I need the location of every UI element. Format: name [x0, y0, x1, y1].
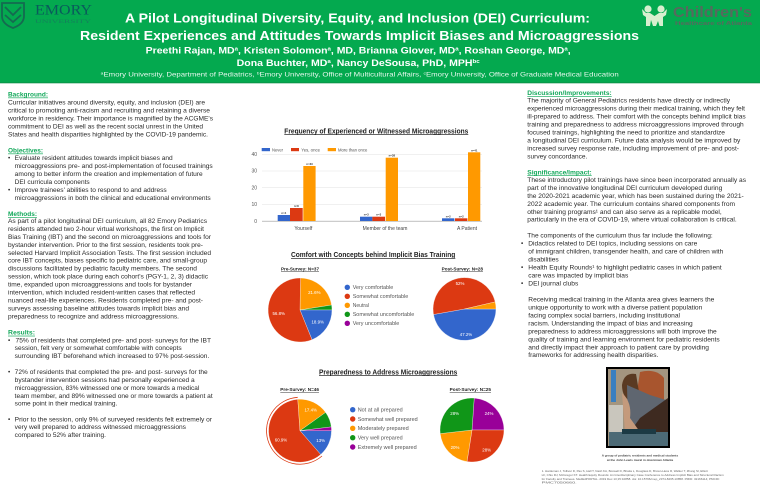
chart legend: Never: [272, 148, 283, 152]
discussion section: increased survey response rate, including improvement of pre- and post-: [527, 145, 739, 152]
references: [542, 469, 724, 485]
objectives section: Objectives:: [8, 148, 43, 154]
pie chart: preparedness pre-survey: 60.9%: [275, 438, 287, 442]
results section: •: [8, 337, 10, 344]
background section: [7, 92, 213, 138]
results section: bystander intervention sessions had personally experienced a: [15, 377, 195, 384]
Children's wordmark: Healthcare of Atlanta: [675, 21, 753, 27]
legend: comfort: Somewhat uncomfortable: [353, 312, 414, 318]
authors: a: [455, 46, 460, 52]
pie chart: preparedness post-survey: 24%: [485, 411, 493, 416]
bar chart: frequency of microaggressions: n=3: [364, 213, 369, 217]
bar chart: frequency of microaggressions: A Patient: [457, 226, 478, 232]
pie chart: preparedness post-survey: 28%: [482, 448, 491, 452]
chart legend: Yes, once: [301, 148, 320, 152]
results section: 75% of residents that completed pre- and post- surveys for the IBT: [16, 337, 211, 344]
significance section: part of the innovative longitudinal DEI curriculum developed during: [527, 185, 723, 192]
header banner: [0, 0, 760, 83]
legend: preparedness: [350, 407, 418, 451]
curriculum components list: of immigrant children, transgender health, and care of children with: [528, 249, 724, 256]
objectives section: •: [8, 155, 10, 162]
title: [80, 10, 639, 43]
significance section: These introductory pilot trainings have since been incorporated annually as: [527, 177, 746, 184]
bar chart: frequency of microaggressions: n=3: [376, 213, 382, 217]
results section: some point in their medical training.: [15, 401, 118, 408]
pie chart: preparedness post-survey: 28%: [450, 411, 459, 416]
pie chart: preparedness post-survey: [440, 398, 504, 462]
pie chart: preparedness post-survey: 20%: [451, 445, 459, 450]
curriculum components list: The components of the curriculum thus far include the following:: [527, 232, 713, 239]
closing paragraph: Receiving medical training in the Atlanta area gives learners the: [528, 297, 715, 304]
objectives section: among to better inform the creation and implementation of future: [15, 171, 203, 178]
bar chart: frequency of microaggressions: 20: [251, 185, 257, 191]
significance section: the 2020-2021 academic year, which has been sustained during the 2021-: [527, 193, 744, 200]
discussion section: training and preparedness to address microaggressions improved through: [527, 122, 744, 129]
authors: Preethi Rajan, MD: [146, 44, 225, 56]
legend: comfort: [345, 285, 414, 327]
panel: center charts: [251, 128, 504, 464]
title: A Pilot Longitudinal Diversity, Equity, and Inclusion (DEI) Curriculum:: [125, 10, 590, 26]
bar chart: frequency of microaggressions: Yourself: [294, 226, 313, 232]
pie chart: comfort pre-survey: 56.8%: [272, 311, 285, 316]
bar chart: frequency of microaggressions: 10: [251, 202, 257, 208]
authors: , Roshan George, MD: [459, 44, 565, 56]
chart legend: [262, 148, 368, 152]
photo caption: [602, 454, 678, 462]
results section: compared to 52% after training.: [15, 432, 106, 439]
authors: a: [327, 59, 332, 65]
significance section: Significance/Impact:: [527, 169, 592, 176]
background section: Background:: [8, 92, 48, 98]
authors: a: [564, 46, 569, 52]
legend: comfort: Very comfortable: [353, 285, 393, 291]
background section: States and health disparities highlighted by the COVID-19 pandemic.: [8, 131, 208, 138]
methods section: surveys assessing baseline attitudes towards implicit bias and: [8, 306, 189, 312]
discussion section: a longitudinal DEI curriculum. Future data analysis would be improved by: [527, 138, 741, 145]
methods section: As part of a pilot longitudinal DEI curriculum, all 82 Emory Pediatrics: [8, 218, 207, 225]
curriculum components list: Health Equity Rounds¹ to highlight pediatric cases in which patient: [528, 265, 722, 272]
Children's wordmark: Children's: [673, 4, 752, 21]
heading: preparedness charts: Preparedness to Address Microaggressions: [319, 369, 457, 376]
references: LF, Chiu RJ, McGregor KT. Health Equity Rounds: An Interdisciplinary Case Conference to Address Implicit Bias and Structural Racism: [542, 473, 724, 477]
closing paragraph: and directly impact their approach to patient care by providing: [528, 344, 709, 352]
bar chart: frequency of microaggressions: [251, 148, 482, 232]
affiliations: Emory University, Office of Graduate Medical Education: [426, 72, 619, 78]
affiliations: Emory University, Office of Multicultural Affairs,: [260, 72, 423, 78]
curriculum components list: •: [521, 265, 523, 272]
discussion section: focused trainings, highlighting the need to prioritize and standardize: [527, 130, 725, 137]
legend: preparedness: Extremely well prepared: [358, 445, 417, 451]
photo caption: at the John Lewis mural in downtown Atlanta: [607, 458, 673, 462]
methods section: selected Harvard Implicit Association Tests. The first session included: [8, 250, 211, 257]
authors: , MD, Brianna Glover, MD: [331, 44, 455, 56]
label: pre-survey comfort: Pre-Survey: N=37: [281, 266, 319, 271]
discussion section: Discussion/Improvements:: [527, 90, 612, 97]
photo caption: A group of pediatric residents and medical students: [602, 454, 678, 458]
icon: Children's logo children: [642, 5, 667, 26]
closing paragraph: unique opportunity to work with a diverse patient population: [528, 305, 703, 312]
objectives section: [8, 148, 213, 202]
discussion section: experienced microaggressions during their medical training, which they felt: [527, 106, 745, 113]
objectives section: microaggressions pre- and post-implementation of focused trainings: [15, 163, 213, 170]
results section: [8, 330, 213, 439]
label: post-survey comfort: Post-Survey: N=28: [442, 266, 483, 271]
bar chart: frequency of microaggressions: n=33: [306, 162, 313, 166]
legend: preparedness: Not at all prepared: [358, 408, 403, 414]
significance section: 2022 academic year. The curriculum contains shared components from: [527, 201, 735, 208]
results section: •: [8, 416, 10, 423]
background section: workforce in residency. Their importance is magnified by the ACGME's: [7, 115, 213, 122]
discussion section: [527, 90, 746, 160]
pie chart: preparedness pre-survey: [267, 397, 332, 464]
label: post-survey preparedness: Post-Survey: N=25: [450, 387, 491, 392]
methods section: discussions facilitated by pediatric faculty members. The second: [8, 266, 197, 273]
methods section: Methods:: [8, 211, 37, 218]
panel: right column: [521, 90, 746, 485]
references: 1. Hardeman J, Tolliver D, Pau S, Hall T, Nash KA, Boswell D, Bhatia L, Douglass D, Brown-Hess R, Walker T, Zhang SI, Elliott: [542, 469, 708, 473]
label: pre-survey preparedness: Pre-Survey: N=46: [280, 387, 319, 392]
affiliations: c: [423, 70, 426, 76]
pie chart: comfort post-survey: 52%: [456, 281, 464, 286]
authors: , Kristen Solomon: [238, 44, 328, 56]
methods section: residents attended two 2-hour virtual workshops, the first on Implicit: [8, 226, 204, 233]
results section: session, felt very or somewhat comfortable with concepts: [15, 345, 182, 352]
legend: comfort: Somewhat comfortable: [353, 294, 408, 300]
pie chart: comfort pre-survey: 21.6%: [308, 290, 321, 295]
curriculum components list: disabilities: [528, 257, 559, 264]
authors: a: [327, 46, 332, 52]
closing paragraph: frameworks for addressing health disparities.: [528, 352, 659, 359]
legend: comfort: Neutral: [353, 303, 369, 309]
closing paragraph: quality of training and learning environment for pediatric residents: [528, 336, 720, 344]
bar chart: frequency of microaggressions: 0: [254, 219, 257, 225]
background section: commitment to DEI as well as the recent social unrest in the United: [8, 123, 203, 130]
results section: •: [8, 369, 10, 376]
significance section: [527, 169, 746, 224]
bar chart: frequency of microaggressions: n=4: [281, 211, 287, 215]
methods section: intervention, which included resident-written cases that reflected: [8, 290, 195, 297]
authors: bc: [472, 59, 480, 65]
methods section: preparedness to recognize and address microaggressions.: [8, 314, 179, 320]
authors: a: [235, 46, 239, 52]
references: for Faculty and Trainees. MedEdPORTAL. 2019 Dec 13;15:10858. doi: 10.15766/mep_2374-8265.10858. PMID: 32166114; PMCID:: [542, 477, 720, 481]
objectives section: Improve trainees' abilities to respond to and address: [15, 187, 167, 194]
photo: residents at the John Lewis mural: [606, 367, 670, 448]
bar chart: frequency of microaggressions: n=2: [446, 214, 451, 218]
objectives section: DEI curricula components: [15, 179, 90, 186]
results section: Results:: [8, 330, 35, 337]
objectives section: microaggressions in both the clinical and educational environments: [15, 195, 211, 202]
methods section: core IBT concepts, biases specific to pediatric care, and small-group: [8, 258, 207, 265]
legend: preparedness: Somewhat well prepared: [358, 417, 418, 423]
pie chart: comfort post-survey: [433, 278, 496, 340]
results section: surrounding IBT beforehand which increased to 97% post-session.: [15, 353, 210, 360]
discussion section: survey concordance.: [527, 153, 588, 160]
authors: [146, 44, 571, 68]
results section: team member, and 89% witnessed one or more towards a patient at: [15, 393, 213, 400]
legend: comfort: Very uncomfortable: [353, 321, 399, 327]
pie chart: comfort post-survey: 47.2%: [460, 332, 472, 337]
pie chart: comfort pre-survey: 18.9%: [311, 320, 324, 324]
affiliations: Emory University, Department of Pediatrics,: [103, 72, 257, 78]
curriculum components list: Didactics related to DEI topics, including sessions on care: [528, 241, 698, 248]
closing paragraph: racism. Understanding the impact of bias and increasing: [528, 321, 693, 328]
background section: critical to promoting anti-racism and recruiting and retaining a diverse: [8, 107, 210, 114]
Emory wordmark: [35, 2, 92, 25]
closing paragraph: preparedness to address microaggressions will both improve the: [528, 328, 717, 336]
bar chart: frequency of microaggressions: Member of the team: [363, 226, 407, 232]
heading: comfort charts: Comfort with Concepts behind Implicit Bias Training: [291, 252, 455, 259]
methods section: Bias Training (IBT) and the second on microaggressions and tools for: [8, 234, 212, 241]
title: Resident Experiences and Attitudes Towards Implicit Biases and Microaggressions: [80, 28, 639, 43]
curriculum components list: •: [521, 241, 523, 248]
results section: very well prepared to address witnessed microaggressions: [15, 424, 186, 431]
affiliations: a: [101, 70, 104, 76]
pie chart: comfort pre-survey: [268, 278, 332, 342]
bar chart: frequency of microaggressions: n=38: [389, 154, 395, 158]
authors: Dona Buchter, MD: [237, 57, 317, 68]
bar chart: frequency of microaggressions: n=41: [471, 148, 478, 152]
results section: Prior to the session, only 9% of surveyed residents felt extremely or: [15, 416, 213, 423]
methods section: bystander intervention. Prior to the first session, residents took pre-: [8, 242, 203, 249]
icon: Emory shield logo: [2, 3, 24, 28]
authors: , Nancy DeSousa, PhD, MPH: [331, 57, 473, 68]
pie chart: preparedness pre-survey: 13%: [316, 438, 325, 443]
methods section: nuanced real-life experiences. Residents completed pre- and post-: [8, 298, 203, 304]
bar chart: frequency of microaggressions: 40: [251, 152, 257, 158]
legend: preparedness: Very well prepared: [358, 436, 403, 442]
bar chart: frequency of microaggressions: n=2: [459, 214, 464, 218]
Emory wordmark: EMORY: [35, 2, 92, 18]
methods section: time, expanded upon microaggressions and tools for bystander: [8, 282, 193, 289]
bar chart: frequency of microaggressions: 30: [251, 169, 257, 175]
discussion section: The majority of General Pediatrics residents have directly or indirectly: [527, 98, 731, 105]
curriculum components list: DEI journal clubs: [528, 281, 578, 288]
methods section: [8, 211, 212, 320]
curriculum components list: •: [521, 281, 523, 288]
objectives section: Evaluate resident attitudes towards implicit biases and: [15, 155, 173, 162]
legend: preparedness: Moderately prepared: [358, 426, 409, 432]
pie chart: preparedness pre-survey: 17.4%: [304, 408, 317, 412]
authors: ,: [568, 44, 571, 56]
discussion section: ill-prepared to address. Their comfort with the concepts behind implicit bias: [527, 114, 746, 121]
Children's wordmark: [673, 4, 753, 27]
chart legend: More than once: [338, 148, 368, 152]
closing paragraph: [528, 297, 720, 359]
curriculum components list: [521, 232, 724, 288]
heading: frequency chart: Frequency of Experienced or Witnessed Microaggressions: [284, 128, 468, 135]
curriculum components list: care was impacted by implicit bias: [528, 273, 628, 280]
closing paragraph: facing complex social barriers, including institutional: [528, 313, 680, 320]
bar chart: frequency of microaggressions: n=8: [294, 204, 299, 208]
background section: Curricular initiatives around diversity, equity, and inclusion (DEI) are: [8, 99, 205, 106]
panel: left column: [7, 92, 213, 439]
methods section: session, which took place during each cohort's (PGY-1, 2, 3) didactic: [8, 274, 209, 281]
results section: 72% of residents that completed the pre- and post- surveys for the: [15, 369, 208, 376]
affiliations: b: [257, 70, 261, 76]
Emory wordmark: UNIVERSITY: [35, 19, 91, 25]
significance section: other training programs¹ and can also serve as a replicable model,: [527, 209, 722, 216]
results section: microaggression, 83% witnessed one or more towards a medical: [15, 385, 199, 392]
references: PMC7050660.: [542, 481, 577, 485]
objectives section: •: [8, 187, 10, 194]
significance section: particularly in the era of COVID-19, where virtual collaboration is critical.: [527, 216, 737, 224]
